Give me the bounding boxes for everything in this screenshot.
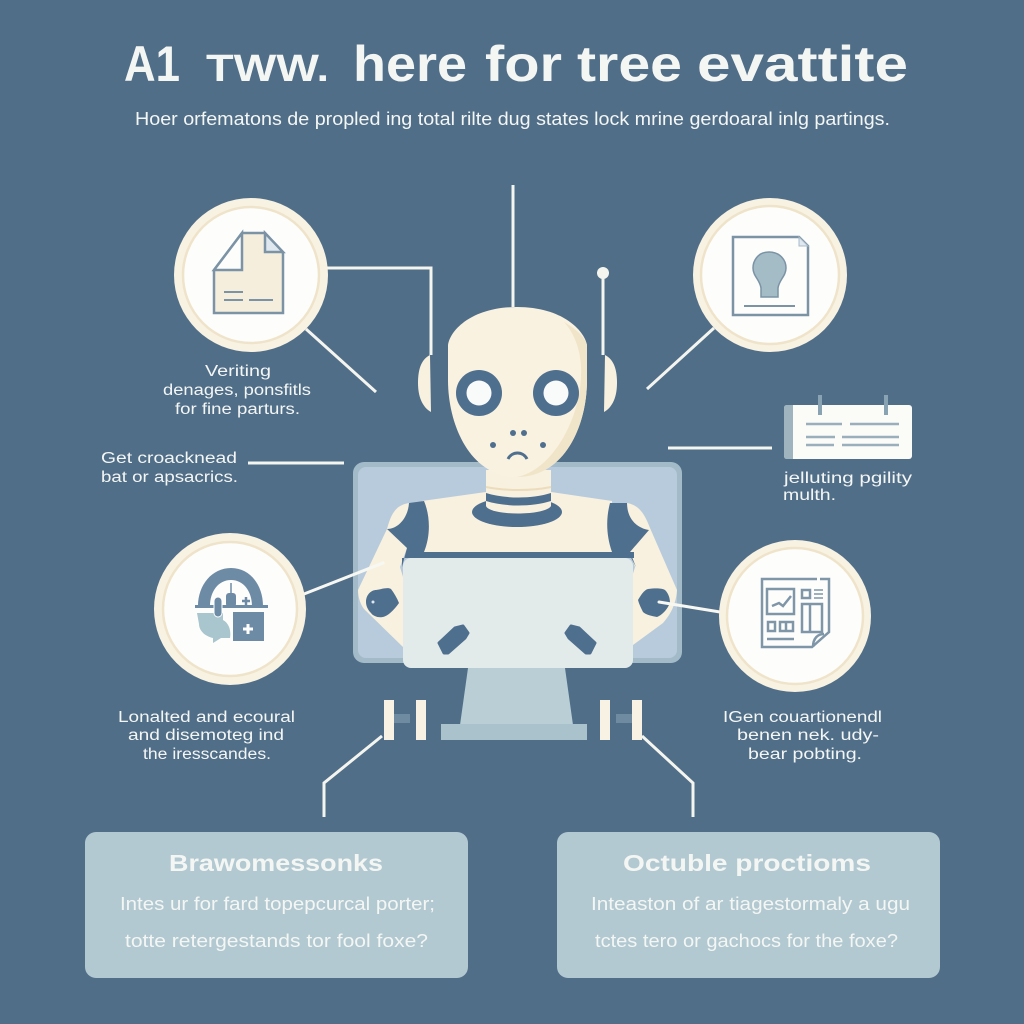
- title: here: [353, 36, 467, 92]
- robot torso: [422, 492, 614, 553]
- right card text: tctes tero or gachocs for the foxe?: [595, 931, 898, 951]
- label: right calendar: [783, 470, 912, 504]
- label: right calendar: jelluting pgility: [783, 470, 912, 487]
- label: top left: Veriting: [205, 363, 271, 380]
- label: top left: [163, 363, 311, 418]
- robot hands: [366, 588, 670, 617]
- label: middle left: [101, 450, 238, 486]
- robot feet bars: [384, 700, 642, 740]
- label: lower left: the iresscandes.: [143, 746, 271, 763]
- icon circle: dashboard: [719, 540, 871, 692]
- robot ears: [418, 355, 617, 412]
- label: lower right: IGen couartionendl: [723, 709, 882, 726]
- connector lines: [248, 185, 772, 817]
- label: top left: for fine parturs.: [175, 401, 300, 418]
- left card text: totte retergestands tor fool foxe?: [125, 931, 428, 951]
- right card text: Inteaston of ar tiagestormaly a ugu: [591, 894, 910, 914]
- arm connector lines: [304, 563, 720, 612]
- label: right calendar: multh.: [783, 487, 836, 504]
- title: tree: [577, 36, 682, 92]
- icon: headset and medical folder: [195, 568, 268, 643]
- label: lower left: and disemoteg ind: [128, 727, 284, 744]
- title: evattite: [697, 36, 908, 92]
- icon: document: [214, 233, 283, 313]
- robot nose and mouth: [490, 430, 546, 459]
- label: lower right: bear pobting.: [748, 746, 862, 763]
- right card heading: Octuble proctioms: [623, 850, 871, 876]
- monitor screen: [353, 462, 682, 663]
- icon circle: document: [174, 198, 328, 352]
- robot shoulders: [387, 501, 649, 567]
- label: middle left: Get croacknead: [101, 450, 237, 467]
- subtitle: Hoer orfematons de propled ing total rilte dug states lock mrine gerdoaral inlg partings.: [135, 109, 890, 129]
- robot collar and neck: [472, 470, 562, 527]
- label: lower left: Lonalted and ecoural: [118, 709, 295, 726]
- robot: [358, 307, 677, 647]
- label: lower left: [118, 709, 295, 763]
- laptop: [403, 558, 633, 668]
- panel: right card: [557, 832, 940, 978]
- icon: calendar card: [784, 395, 912, 459]
- title: TWW.: [206, 48, 329, 90]
- icon circle: support: [154, 533, 306, 685]
- left card text: Intes ur for fard topepcurcal porter;: [120, 894, 435, 914]
- monitor stand: [441, 668, 587, 740]
- robot head: [448, 307, 587, 477]
- right card text: [591, 894, 910, 951]
- title: [124, 36, 908, 92]
- icon: dashboard page: [762, 579, 829, 647]
- label: middle left: bat or apsacrics.: [101, 469, 238, 486]
- laptop thumbs: [439, 626, 595, 653]
- label: lower right: benen nek. udy-: [737, 727, 879, 744]
- head shading: [517, 322, 587, 477]
- left card heading: Brawomessonks: [169, 850, 383, 876]
- left card text: [120, 894, 435, 951]
- title: for: [485, 36, 562, 92]
- title: A1: [124, 36, 180, 92]
- label: lower right: [723, 709, 882, 763]
- robot eyes: [456, 370, 579, 416]
- icon: light bulb page: [733, 237, 808, 315]
- label: top left: denages, ponsfitls: [163, 382, 311, 399]
- panel: left card: [85, 832, 468, 978]
- icon circle: light bulb: [693, 198, 847, 352]
- robot arms: [358, 503, 677, 647]
- antenna dot: [597, 267, 609, 279]
